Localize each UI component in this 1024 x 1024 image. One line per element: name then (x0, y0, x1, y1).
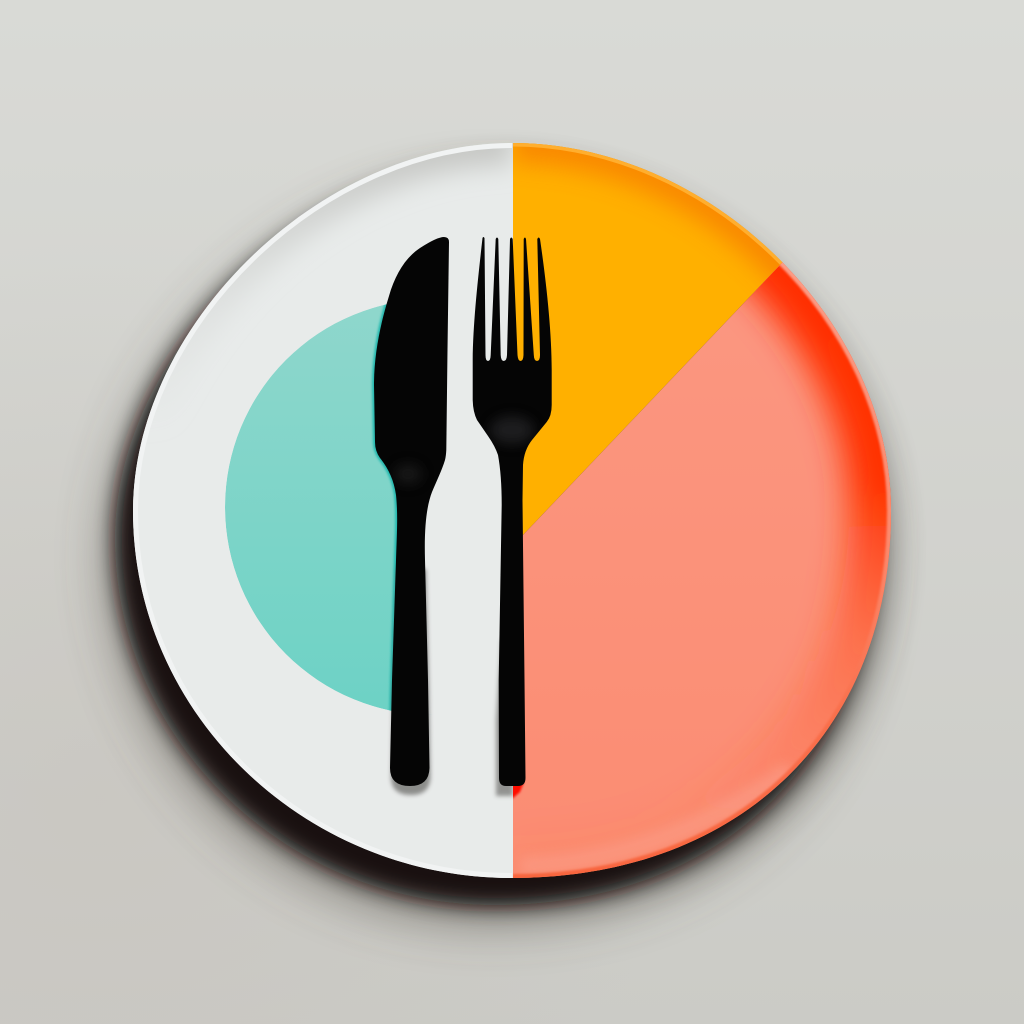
cutlery shadows (391, 569, 513, 796)
orange segment (513, 143, 782, 536)
icon: knife (374, 237, 449, 786)
icon: fork (472, 237, 552, 786)
red reflection below fork (510, 782, 524, 798)
salmon segment (513, 262, 891, 878)
white half of plate (133, 143, 513, 878)
plate shadow (111, 165, 893, 920)
teal circle segment (225, 304, 431, 715)
plate (133, 143, 891, 878)
